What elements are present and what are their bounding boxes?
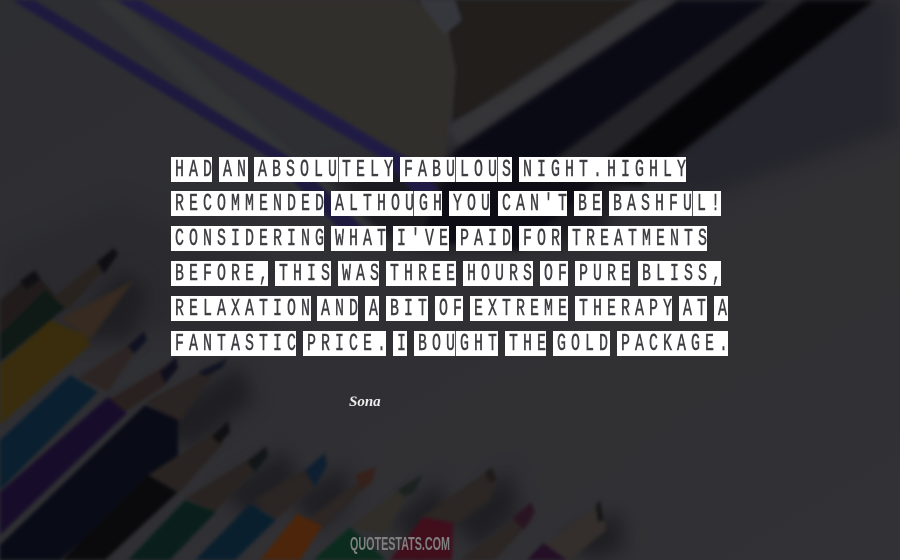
pencil: green bbox=[185, 447, 268, 512]
pencil: dark tip top bbox=[0, 270, 62, 350]
pencil: orange bbox=[298, 468, 376, 530]
quote line 6 bbox=[171, 331, 728, 356]
quote line 4 bbox=[171, 261, 721, 286]
pencil: blue 2 bbox=[255, 456, 326, 520]
pencil: magenta bbox=[460, 503, 533, 560]
quote line 5 bbox=[171, 296, 728, 321]
pencil shadows bbox=[70, 270, 625, 560]
pencil: navy bbox=[145, 358, 228, 422]
book and ruled lines bbox=[0, 0, 900, 340]
quote line 1 bbox=[171, 157, 686, 182]
author name: Sona bbox=[349, 394, 381, 410]
pencil: brown red bbox=[420, 468, 497, 525]
pencil: dark bbox=[148, 422, 230, 492]
pencil: green brown bbox=[52, 248, 118, 310]
quote line 3 bbox=[171, 226, 707, 251]
pencil: green 3 bbox=[350, 474, 421, 535]
pencils bbox=[0, 248, 606, 560]
quote text block bbox=[171, 157, 728, 356]
pencil: blue bbox=[78, 333, 145, 392]
pencil: purple bbox=[530, 502, 606, 560]
pencil: purple bbox=[108, 358, 178, 412]
pencil: yellow bbox=[60, 281, 133, 340]
quote line 2 bbox=[171, 191, 721, 216]
